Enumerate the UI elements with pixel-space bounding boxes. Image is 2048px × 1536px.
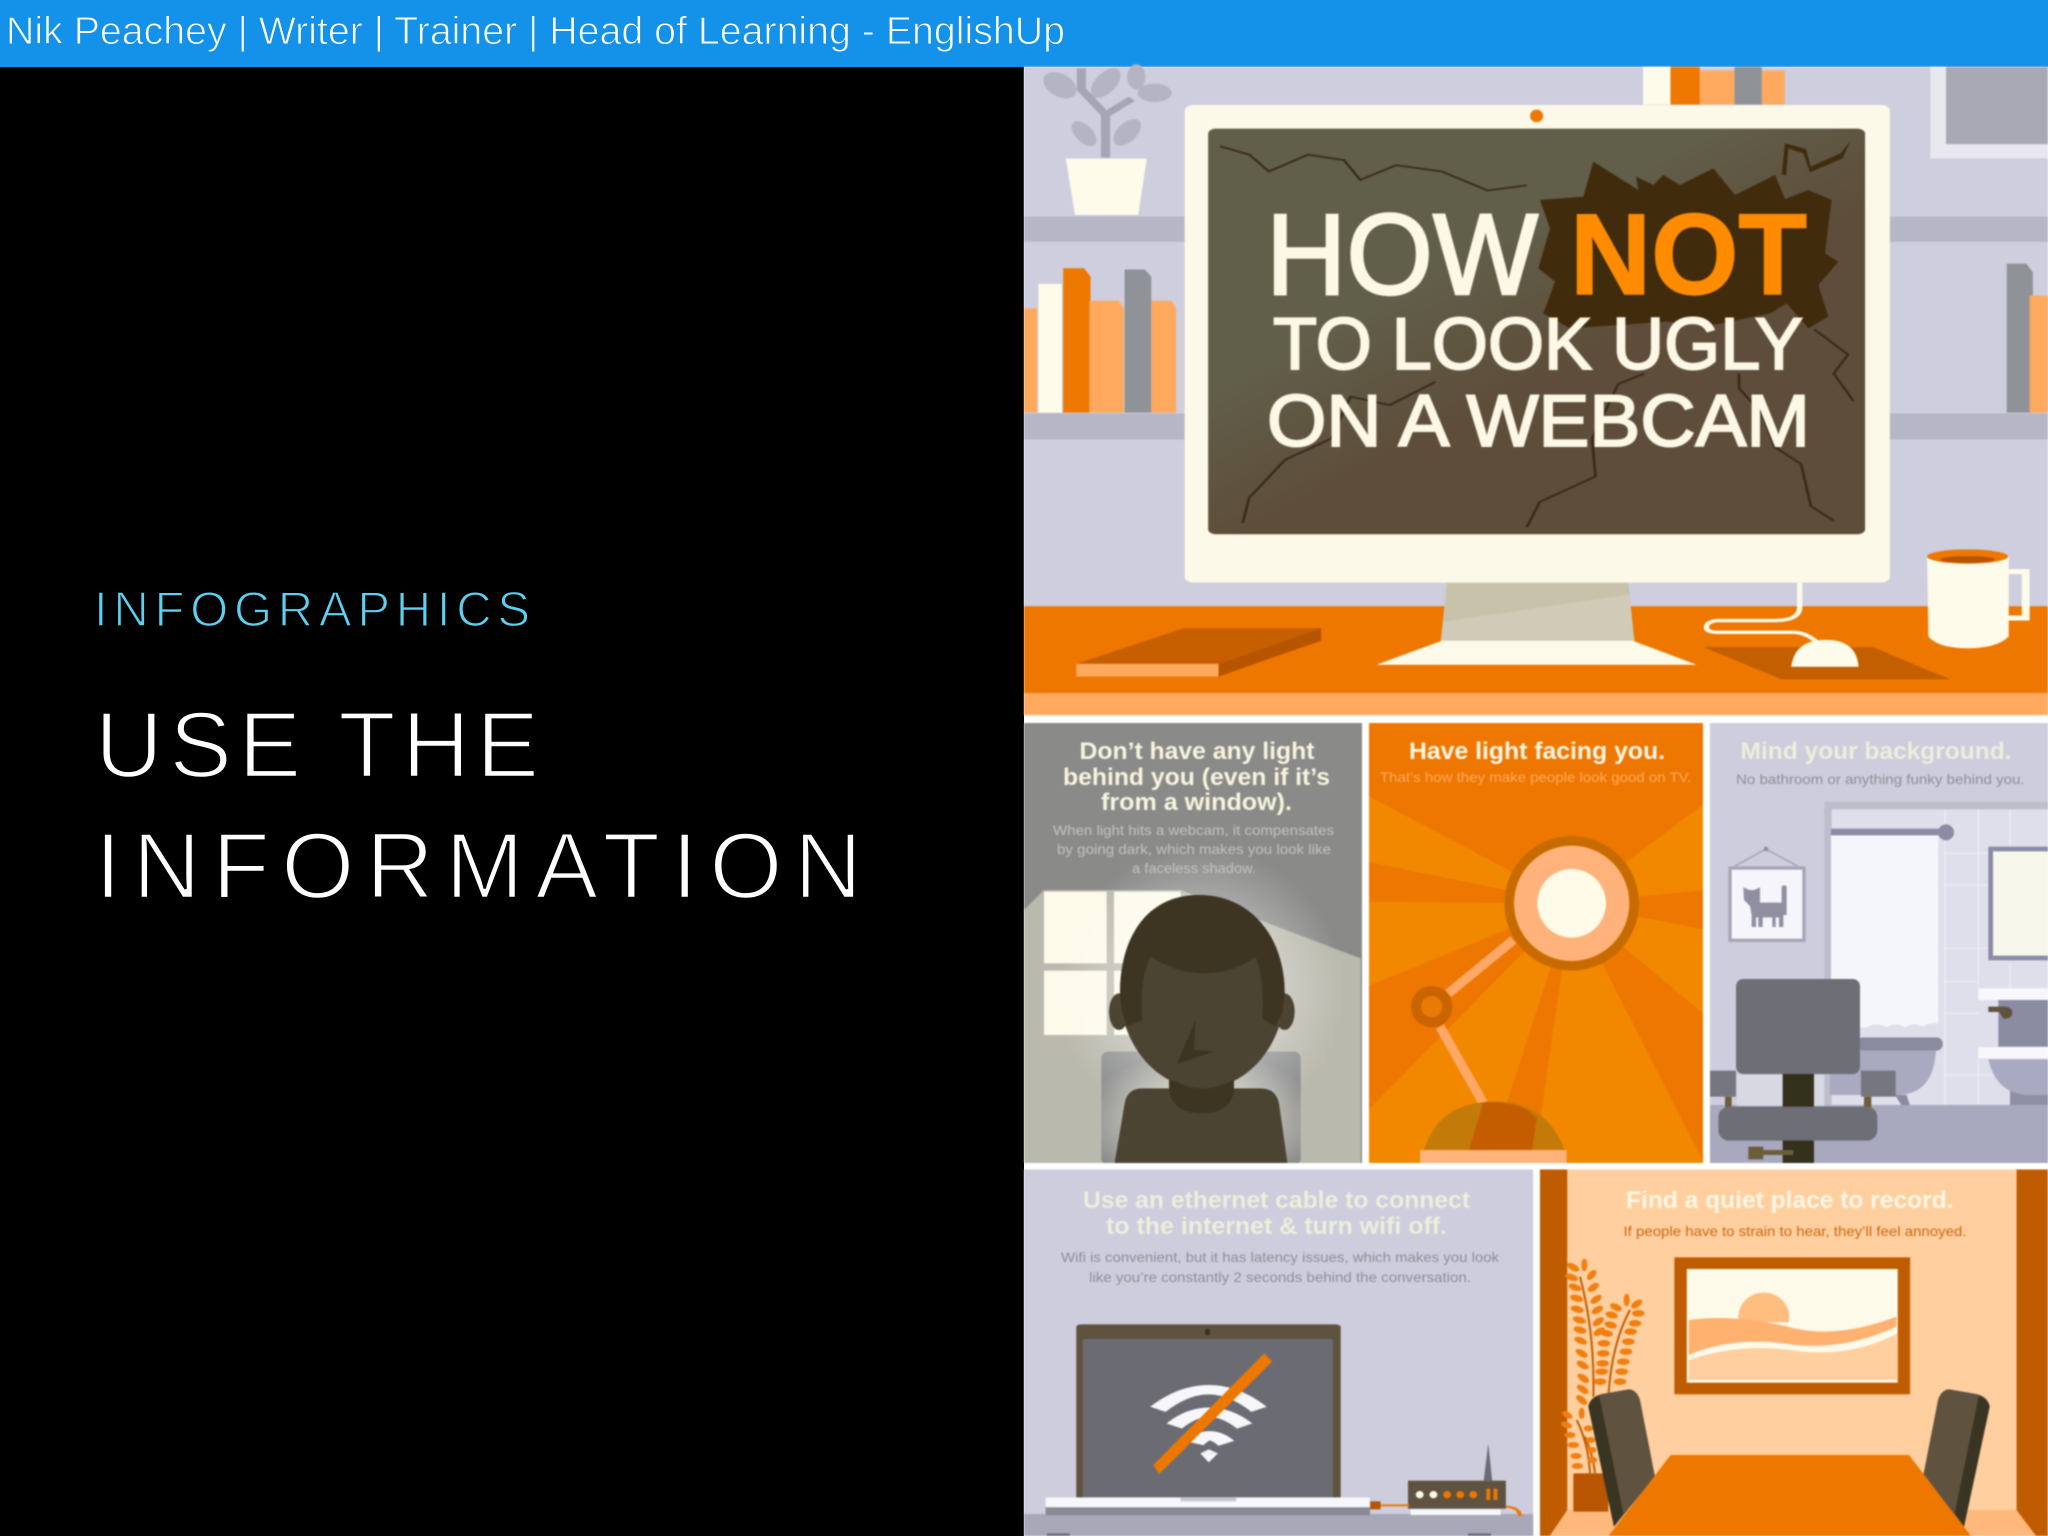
panel 3 text bbox=[1736, 738, 2025, 787]
panel 5 text: Find a quiet place to record. bbox=[1626, 1187, 1954, 1214]
panel 4 text: Wifi is convenient, but it has latency issues, which makes you look bbox=[1061, 1249, 1500, 1265]
lit wall wedge bbox=[1024, 890, 1361, 1163]
section label: INFOGRAPHICS bbox=[94, 583, 530, 637]
wall picture bbox=[1930, 67, 2048, 158]
heading line 2: INFORMATION bbox=[95, 813, 862, 918]
wall picture bbox=[1674, 1257, 1910, 1394]
monitor title bbox=[1266, 191, 1810, 462]
lamp base bbox=[1420, 1102, 1567, 1167]
panel 3 text: No bathroom or anything funky behind you. bbox=[1736, 771, 2025, 787]
monitor title: TO LOOK UGLY bbox=[1273, 304, 1803, 385]
books left bbox=[1024, 268, 1176, 413]
banner text: Nik Peachey | Writer | Trainer | Head of Learning - EnglishUp bbox=[6, 10, 1065, 53]
glow around head bbox=[1080, 862, 1322, 1092]
top banner bbox=[0, 0, 2048, 67]
screen hole and crack bbox=[1538, 142, 1850, 328]
panel 4 text: like you’re constantly 2 seconds behind the conversation. bbox=[1089, 1269, 1471, 1285]
desk surface bbox=[1024, 1514, 1533, 1536]
panel 1 text: When light hits a webcam, it compensates bbox=[1053, 822, 1334, 838]
toilet bbox=[1978, 988, 2048, 1107]
shelves bbox=[1024, 217, 2048, 440]
left panel: slide heading bbox=[94, 583, 862, 918]
panel 3 text: Mind your background. bbox=[1740, 738, 2012, 765]
floor bbox=[1710, 1105, 2048, 1168]
panel: ethernet cable bbox=[1024, 1169, 1533, 1536]
panel 2 text: Have light facing you. bbox=[1409, 738, 1665, 765]
shower curtain bbox=[1831, 824, 1954, 1030]
lamp head bbox=[1504, 836, 1639, 971]
icon: crossed wifi bbox=[1153, 1353, 1272, 1474]
left chair bbox=[1588, 1389, 1655, 1527]
router bbox=[1370, 1443, 1520, 1516]
wall bbox=[1024, 67, 2048, 610]
panel: quiet place bbox=[1540, 1169, 2048, 1536]
books right bbox=[2007, 264, 2048, 413]
mirror bbox=[1991, 849, 2048, 958]
bathroom wall tiles bbox=[1824, 802, 2048, 1107]
chair back bbox=[1101, 1052, 1301, 1165]
panel: no light behind you bbox=[1024, 723, 1362, 1167]
desk bbox=[1024, 606, 2048, 715]
cracked screen bbox=[1208, 129, 1865, 534]
panel 5 text bbox=[1624, 1187, 1966, 1239]
bathtub bbox=[1830, 1037, 1943, 1106]
monitor stand bbox=[1377, 582, 1697, 665]
monitor bbox=[1185, 105, 1890, 583]
floor bbox=[1540, 1510, 2048, 1536]
plant bbox=[1560, 1259, 1645, 1512]
panel 4 text bbox=[1061, 1187, 1500, 1285]
book on desk bbox=[1076, 628, 1321, 676]
panel 5 text: If people have to strain to hear, they’ll feel annoyed. bbox=[1624, 1223, 1966, 1239]
panel 1 text: by going dark, which makes you look like bbox=[1057, 841, 1331, 857]
light rays bbox=[1367, 795, 1707, 1165]
panel 2 text: That’s how they make people look good on TV. bbox=[1380, 769, 1692, 785]
icon: potted plant bbox=[1036, 64, 1172, 215]
coffee mug bbox=[1927, 549, 2026, 648]
window bbox=[1044, 892, 1181, 1035]
panel 1 text: a faceless shadow. bbox=[1132, 860, 1256, 876]
cat picture bbox=[1730, 847, 1804, 940]
monitor title: NOT bbox=[1570, 191, 1807, 319]
mouse and pad bbox=[1703, 583, 1950, 679]
silhouette person bbox=[1109, 895, 1295, 1167]
lamp arm bbox=[1440, 940, 1513, 1103]
side walls bbox=[1540, 1169, 2048, 1536]
monitor title: ON A WEBCAM bbox=[1267, 381, 1810, 462]
right chair bbox=[1923, 1389, 1990, 1527]
panel 4 text: to the internet & turn wifi off. bbox=[1106, 1213, 1447, 1240]
panel 2 text bbox=[1380, 738, 1692, 785]
panel 1 text: Don’t have any light bbox=[1080, 738, 1314, 765]
panel 1 text bbox=[1053, 738, 1334, 876]
books top bbox=[1643, 67, 1785, 105]
panel: mind your background bbox=[1710, 723, 2048, 1168]
panel 4 text: Use an ethernet cable to connect bbox=[1083, 1187, 1470, 1214]
panel 1 text: behind you (even if it’s bbox=[1063, 764, 1330, 791]
office chair bbox=[1710, 979, 1896, 1165]
lamp joint bbox=[1416, 991, 1447, 1022]
infographic header scene: desk with monitor bbox=[1024, 64, 2048, 715]
table bbox=[1609, 1455, 1971, 1536]
laptop bbox=[1046, 1324, 1370, 1515]
webcam bbox=[1530, 110, 1543, 122]
monitor title: HOW bbox=[1266, 191, 1538, 319]
heading line 1: USE THE bbox=[95, 692, 539, 797]
panel: light facing you bbox=[1367, 723, 1707, 1167]
panel 1 text: from a window). bbox=[1101, 789, 1292, 816]
